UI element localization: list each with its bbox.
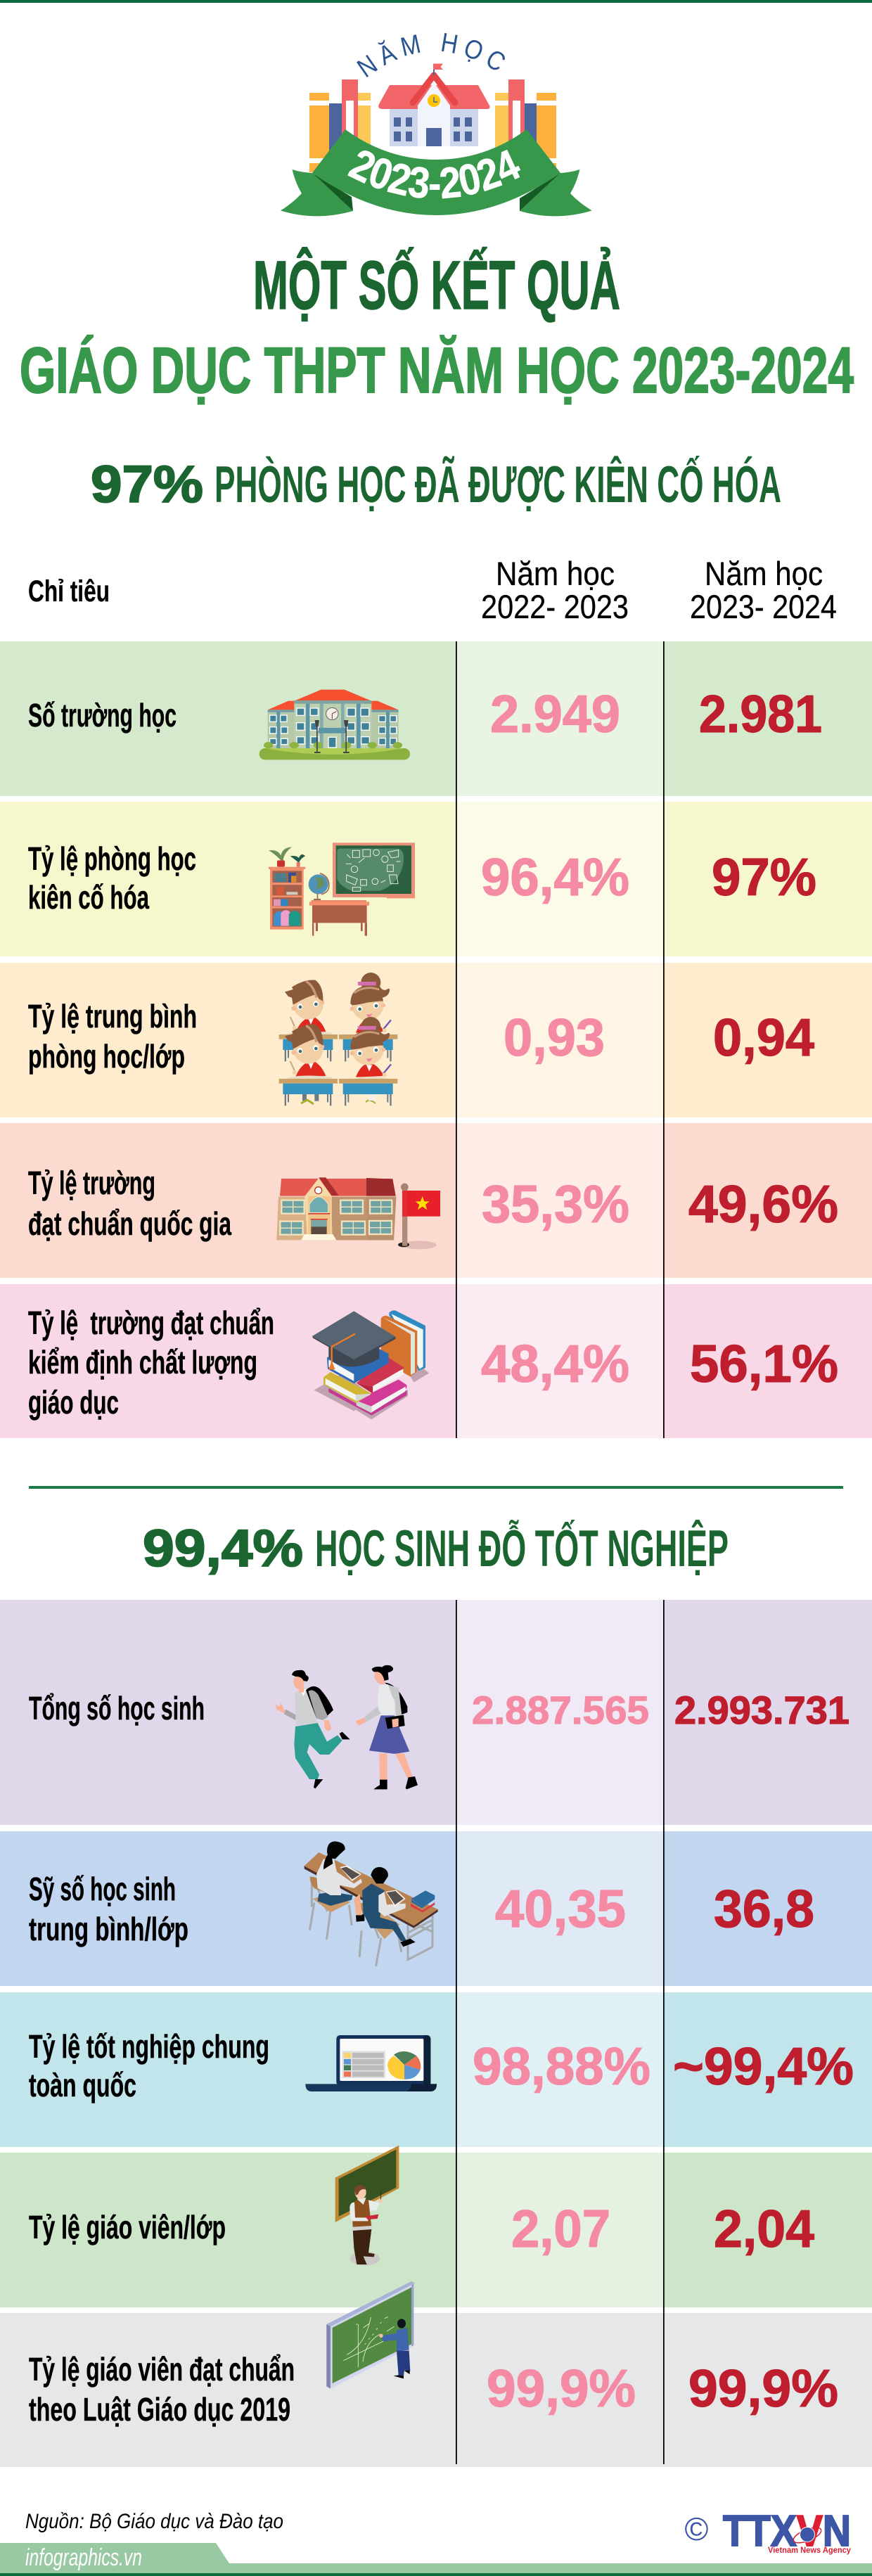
ribbon year text [347,174,525,198]
row: national standard schools: 35,3% [482,1174,629,1233]
books right [495,79,556,172]
row: number of schools: 2.981 [699,684,822,743]
title [20,247,854,406]
row: number of schools [28,684,822,760]
row: quality accredited schools: 56,1% [690,1334,838,1393]
icon: teacher at blackboard [335,2146,399,2266]
row: qualified teachers: 99,9% [487,2359,636,2418]
logo: school year emblem [281,32,592,217]
row: class size: 40,35 [495,1879,626,1938]
row: graduation rate: Tỷ lệ tốt nghiệp chung [29,2028,269,2065]
logo: TTXVN: Vietnam News Agency [768,2545,851,2555]
divider [29,1486,843,1489]
table header: Năm học [705,555,823,592]
table header [28,555,837,625]
row: class size [29,1841,814,1966]
row: national standard schools: 49,6% [688,1174,838,1233]
row: qualified teachers: Tỷ lệ giáo viên đạt chuẩn [29,2351,295,2388]
row: quality accredited schools: kiểm định chất lượng [28,1344,257,1380]
row bands [0,641,872,2467]
row: room/class ratio: 0,93 [504,1008,605,1067]
row: room/class ratio [28,973,814,1106]
title: MỘT SỐ KẾT QUẢ [253,247,620,323]
row: graduation rate [29,2028,854,2103]
icon: pupils at desks [279,973,397,1106]
row: class size: Sỹ số học sinh [29,1871,176,1907]
icon: two students walking [276,1665,418,1789]
icon: students at shared desk [304,1841,438,1966]
row: teacher/class: Tỷ lệ giáo viên/lớp [29,2209,226,2245]
row: graduation rate: toàn quốc [29,2067,136,2103]
icon: classroom with blackboard [269,842,415,936]
books left [309,79,371,172]
arc heading [366,51,506,79]
logo: TTXVN: TTXVN [723,2507,851,2556]
row: teacher/class: 2,04 [714,2199,814,2258]
icon: graduation cap on books [312,1310,429,1419]
row: solid classrooms: 96,4% [481,847,629,906]
row: solid classrooms: Tỷ lệ phòng học [28,840,196,877]
table header: 2023- 2024 [690,588,837,625]
row: national standard schools [28,1165,838,1249]
row: total students: 2.887.565 [472,1688,649,1732]
website: infographics.vn [25,2544,142,2571]
ribbon [281,129,592,216]
row: quality accredited schools: Tỷ lệ trường đạt chuẩn [28,1305,274,1341]
row: graduation rate: ~99,4% [673,2037,854,2096]
row: national standard schools: đạt chuẩn quốc gia [28,1205,231,1242]
row: total students [29,1665,849,1789]
source note: Nguồn: Bộ Giáo dục và Đào tạo [25,2510,283,2533]
row: room/class ratio: Tỷ lệ trung bình [28,998,197,1034]
table header: Năm học [496,555,615,592]
row: class size: trung bình/lớp [29,1911,188,1947]
section heading: graduation [143,1519,729,1577]
table header: Chỉ tiêu [28,575,110,608]
footer band [0,2543,872,2576]
row: total students: Tổng số học sinh [29,1690,205,1726]
logo: school year emblem: NĂM HỌC [357,32,505,77]
row: number of schools: 2.949 [490,684,620,743]
row: room/class ratio: 0,94 [713,1008,814,1067]
logo: school year emblem: 2023-2024 [347,149,520,198]
icon: school building [259,690,410,760]
row: number of schools: Số trường học [28,697,177,733]
icon: school with flag [276,1177,440,1249]
row: graduation rate: 98,88% [473,2037,650,2096]
section heading: classrooms: 97% [91,455,203,513]
row: qualified teachers [29,2281,838,2428]
school building [378,63,489,146]
row: national standard schools: Tỷ lệ trường [28,1165,155,1201]
row: qualified teachers: 99,9% [688,2359,838,2418]
row: class size: 36,8 [714,1879,814,1938]
row: solid classrooms: 97% [712,847,816,906]
icon: teacher writing on board [326,2281,415,2389]
row: solid classrooms: kiên cố hóa [28,879,149,916]
section heading: graduation: 99,4% [143,1519,303,1577]
row: room/class ratio: phòng học/lớp [28,1038,185,1075]
row: total students: 2.993.731 [674,1688,849,1732]
row: teacher/class: 2,07 [511,2199,610,2258]
table header: 2022- 2023 [481,588,629,625]
row: teacher/class [29,2146,814,2266]
icon: laptop with chart [305,2035,437,2091]
row: qualified teachers: theo Luật Giáo dục 2019 [29,2391,290,2428]
logo: TTXVN: © [685,2511,709,2547]
row: quality accredited schools [28,1305,838,1421]
row: solid classrooms [28,840,816,936]
row: quality accredited schools: giáo dục [28,1384,119,1421]
row: quality accredited schools: 48,4% [481,1334,629,1393]
